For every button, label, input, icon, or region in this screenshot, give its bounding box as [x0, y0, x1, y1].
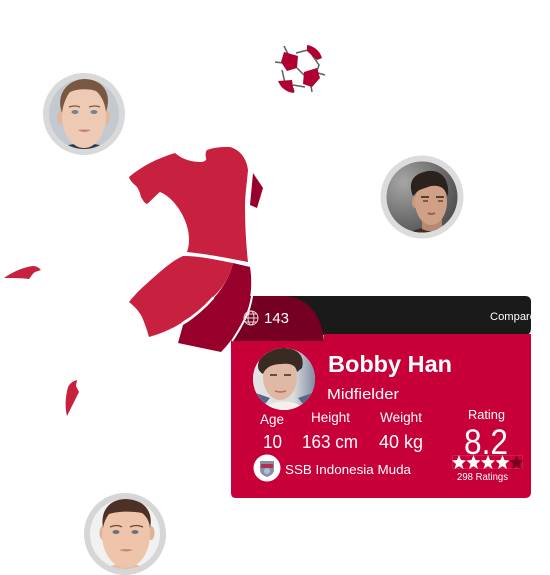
portrait: boy top left — [43, 73, 125, 155]
stat: age — [260, 411, 284, 452]
card: red panel — [231, 334, 531, 498]
text: rank 143: 143 — [264, 310, 289, 327]
stat: height: 163 cm — [302, 432, 358, 452]
header: black bar — [231, 296, 531, 335]
shorts: light leg — [129, 256, 233, 337]
stat: height — [302, 410, 358, 452]
avatar: Bobby Han — [253, 348, 315, 412]
stat: age: Age — [260, 411, 284, 427]
text: Compare button: Compare — [490, 311, 536, 323]
icon: globe — [244, 311, 258, 325]
stat: weight: 40 kg — [379, 432, 423, 452]
fragment: red shape left — [4, 266, 41, 279]
shorts: white slit between legs — [183, 298, 213, 323]
shorts: white outline over card — [232, 268, 253, 341]
shirt — [129, 147, 248, 262]
card: player header — [231, 296, 536, 341]
icon: rating stars — [452, 455, 524, 469]
stat: weight — [379, 410, 423, 452]
icon: club badge — [254, 454, 280, 482]
header: dark red tab — [231, 296, 324, 341]
stat: weight: Weight — [380, 410, 422, 425]
text: club name: SSB Indonesia Muda — [285, 462, 412, 477]
icon: football — [275, 45, 325, 93]
text: rating label: Rating — [468, 407, 505, 422]
stat: age: 10 — [263, 432, 282, 452]
portrait: young man right — [380, 156, 464, 240]
rating — [452, 407, 524, 483]
text: ratings count: 298 Ratings — [457, 472, 508, 483]
shorts — [129, 256, 253, 352]
shorts: dark leg — [178, 263, 251, 352]
portrait: boy bottom — [84, 493, 166, 575]
text: rating value: 8.2 — [464, 423, 508, 462]
shirt sleeve: dark — [250, 173, 263, 208]
heading: player name: Bobby Han — [328, 351, 452, 377]
text: position: Midfielder — [327, 386, 399, 403]
fragment: red shape lower left — [66, 380, 79, 416]
stat: height: Height — [311, 410, 350, 425]
